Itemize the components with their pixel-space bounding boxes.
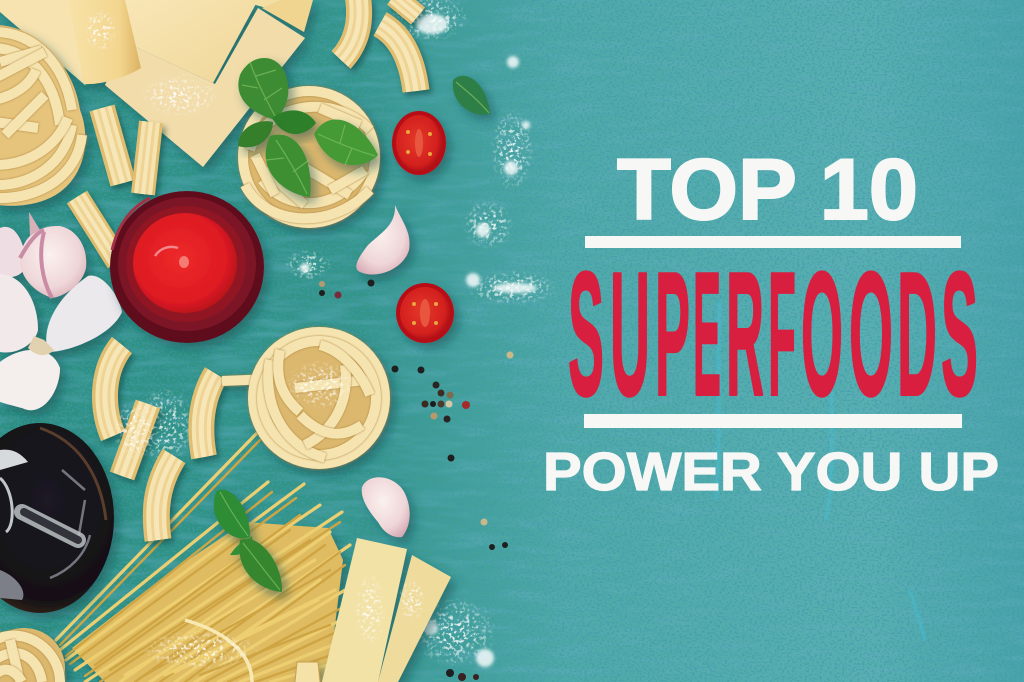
flour dusting on table bbox=[146, 0, 556, 670]
garlic clove lower bbox=[362, 477, 410, 537]
garlic bulb left bbox=[0, 212, 122, 410]
rigatoni tube floured bbox=[122, 404, 148, 476]
divider line bottom bbox=[584, 414, 962, 428]
title: SUPERFOODS: R bbox=[726, 235, 764, 433]
oil bottle bbox=[0, 423, 114, 613]
lasagna sheets top left bbox=[0, 0, 313, 167]
title: SUPERFOODS: U bbox=[610, 235, 650, 433]
rigatoni tube bbox=[102, 108, 123, 183]
rigatoni tube curved bbox=[380, 24, 416, 91]
cherry tomato lower bbox=[396, 283, 454, 343]
title: SUPERFOODS: E bbox=[693, 235, 721, 433]
rigatoni tube curved bbox=[105, 345, 122, 436]
spaghetti bundle bbox=[56, 434, 350, 682]
rigatoni lower group bbox=[105, 345, 216, 540]
leaf bbox=[272, 110, 316, 134]
title: SUPERFOODS: S bbox=[568, 235, 604, 433]
title: SUPERFOODS: P bbox=[655, 235, 690, 433]
rigatoni tube curved bbox=[201, 374, 216, 457]
rigatoni tube curved bbox=[341, 0, 359, 60]
title: SUPERFOODS: O bbox=[801, 235, 843, 433]
peppercorns bbox=[319, 280, 514, 681]
title: SUPERFOODS: D bbox=[897, 235, 937, 433]
leaf bbox=[266, 135, 311, 197]
basil on nest bbox=[238, 58, 378, 197]
lasagna sheets bottom bbox=[295, 538, 451, 682]
leaf bbox=[238, 58, 288, 120]
title: SUPERFOODS: O bbox=[849, 235, 893, 433]
divider line top bbox=[585, 236, 961, 248]
title: SUPERFOODS: F bbox=[768, 235, 796, 433]
tagliatelle nest top left bbox=[0, 25, 85, 206]
title: SUPERFOODS bbox=[568, 235, 978, 433]
garlic clove centre bbox=[356, 205, 410, 275]
basil on spaghetti bbox=[214, 490, 282, 592]
title: TOP 10: TOP 10 bbox=[617, 142, 918, 238]
tagliatelle nest bottom left bbox=[0, 628, 65, 682]
flour on pasta bbox=[85, 10, 424, 669]
loose basil leaf top bbox=[453, 76, 490, 115]
rigatoni tube curved bbox=[156, 456, 174, 540]
cherry tomato upper bbox=[392, 111, 446, 175]
leaf bbox=[314, 119, 378, 165]
tagliatelle nest centre bbox=[222, 328, 389, 468]
rigatoni tube bbox=[143, 122, 151, 194]
tagliatelle nest with basil bbox=[239, 87, 379, 227]
rigatoni tube corner bbox=[394, 0, 418, 16]
rigatoni upper group bbox=[77, 0, 418, 262]
leaf bbox=[238, 121, 273, 147]
subtitle: POWER YOU UP: POWER YOU UP bbox=[543, 442, 999, 502]
jar of tomato sauce bbox=[110, 191, 264, 343]
rigatoni tube bbox=[77, 197, 118, 262]
